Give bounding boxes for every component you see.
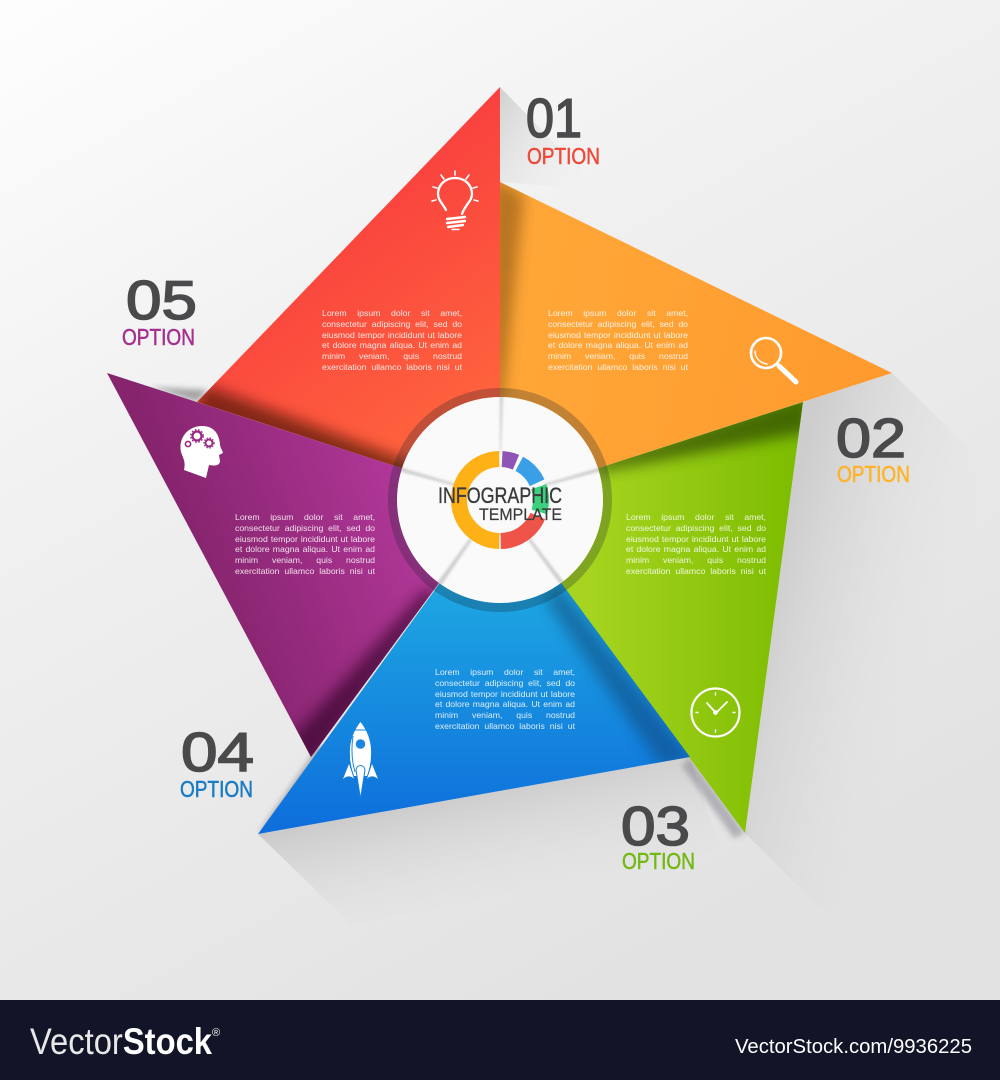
text block: green panel: consectetur adipiscing elit, sed do: [626, 523, 766, 533]
center title: INFOGRAPHIC: [438, 483, 562, 508]
icon: magnifier: [751, 338, 796, 382]
panel: purple: [107, 373, 439, 757]
label: 01: 01: [526, 87, 582, 149]
long shadows: [150, 87, 990, 925]
ring: [392, 392, 608, 608]
text block: blue panel: minim veniam, quis nostrud: [435, 710, 575, 720]
footer url: VectorStock.com/9936225: [735, 1036, 972, 1058]
icon: head with gears: [180, 426, 223, 478]
text block: purple panel: Lorem ipsum dolor sit amet,: [235, 512, 375, 522]
text block: red panel: et dolore magna aliqua. Ut enim ad: [322, 340, 462, 350]
text block: blue panel: exercitation ullamco laboris nisi ut: [435, 721, 575, 731]
text block: orange panel: eiusmod tempor incididunt ut labore: [548, 330, 688, 340]
text block: blue panel: consectetur adipiscing elit, sed do: [435, 678, 575, 688]
footer logo: VectorStock: [30, 1021, 212, 1062]
label: 02: OPTION: [837, 461, 910, 487]
text block: purple panel: [235, 512, 375, 576]
label: 05: [122, 269, 197, 350]
label: 04: [180, 721, 254, 802]
text block: purple panel: exercitation ullamco laboris nisi ut: [235, 566, 375, 576]
label: 03: OPTION: [622, 848, 695, 874]
text block: purple panel: eiusmod tempor incididunt ut labore: [235, 534, 375, 544]
label: 03: [621, 795, 695, 874]
text block: red panel: Lorem ipsum dolor sit amet,: [322, 308, 462, 318]
footer bar: [0, 1000, 1000, 1080]
text block: blue panel: et dolore magna aliqua. Ut enim ad: [435, 699, 575, 709]
text block: blue panel: [435, 667, 575, 731]
text block: orange panel: Lorem ipsum dolor sit amet,: [548, 308, 688, 318]
text block: purple panel: consectetur adipiscing elit, sed do: [235, 523, 375, 533]
center subtitle: TEMPLATE: [479, 505, 562, 524]
panel: red: [190, 87, 500, 500]
center circle: [392, 392, 608, 608]
label: 04: OPTION: [180, 776, 253, 802]
text block: blue panel: eiusmod tempor incididunt ut labore: [435, 688, 575, 698]
text block: orange panel: et dolore magna aliqua. Ut enim ad: [548, 340, 688, 350]
text block: orange panel: minim veniam, quis nostrud: [548, 351, 688, 361]
label: 03: 03: [621, 795, 690, 857]
label: 04: 04: [181, 721, 254, 783]
label: 01: [526, 87, 600, 169]
text block: green panel: [626, 512, 766, 576]
panel: blue: [258, 582, 690, 834]
label: 05: OPTION: [122, 324, 195, 350]
panel: orange: [500, 182, 892, 468]
donut chart: [459, 459, 541, 541]
text block: orange panel: [548, 308, 688, 372]
text block: green panel: Lorem ipsum dolor sit amet,: [626, 512, 766, 522]
text block: green panel: exercitation ullamco laboris nisi ut: [626, 566, 766, 576]
text block: green panel: eiusmod tempor incididunt ut labore: [626, 534, 766, 544]
text block: red panel: [322, 308, 462, 372]
panel: green: [561, 402, 803, 833]
label: 01: OPTION: [527, 143, 600, 169]
white disc: [397, 397, 603, 603]
text block: blue panel: Lorem ipsum dolor sit amet,: [435, 667, 575, 677]
text block: purple panel: minim veniam, quis nostrud: [235, 555, 375, 565]
text block: green panel: minim veniam, quis nostrud: [626, 555, 766, 565]
label: 02: [836, 407, 910, 487]
text block: red panel: consectetur adipiscing elit, sed do: [322, 319, 462, 329]
text block: red panel: minim veniam, quis nostrud: [322, 351, 462, 361]
text block: orange panel: exercitation ullamco laboris nisi ut: [548, 362, 688, 372]
icon: rocket: [343, 722, 378, 799]
label: 02: 02: [836, 407, 906, 469]
text block: red panel: exercitation ullamco laboris nisi ut: [322, 362, 462, 372]
icon: light bulb: [432, 171, 478, 230]
text block: orange panel: consectetur adipiscing elit, sed do: [548, 319, 688, 329]
icon: clock: [692, 688, 740, 736]
text block: purple panel: et dolore magna aliqua. Ut enim ad: [235, 544, 375, 554]
text block: red panel: eiusmod tempor incididunt ut labore: [322, 330, 462, 340]
label: 05: 05: [126, 269, 197, 331]
registered mark: ®: [212, 1027, 220, 1039]
text block: green panel: et dolore magna aliqua. Ut enim ad: [626, 544, 766, 554]
